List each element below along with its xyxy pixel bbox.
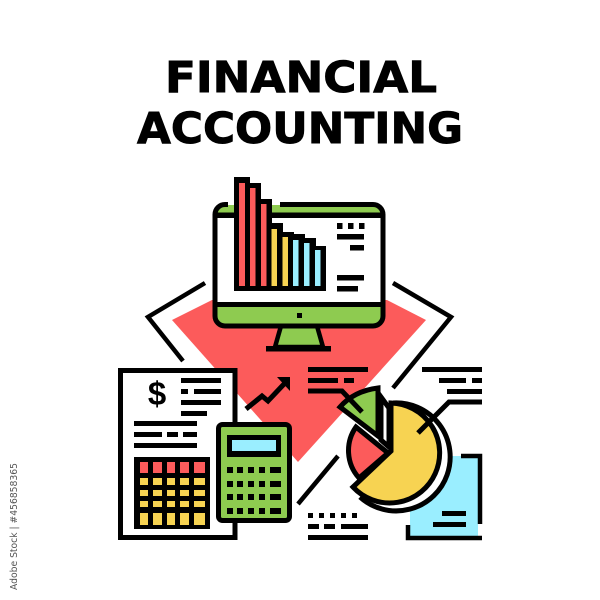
calculator screen	[227, 435, 281, 457]
red diamond background	[172, 300, 426, 462]
left chevron line	[148, 283, 205, 361]
monitor body	[215, 204, 383, 326]
lower text lines	[308, 513, 368, 540]
diagonal line	[298, 456, 338, 504]
calculator	[218, 424, 290, 520]
monitor screen text lines	[337, 223, 364, 292]
bar chart	[234, 177, 326, 291]
financial document	[120, 370, 235, 538]
monitor stand	[266, 326, 331, 352]
title	[137, 53, 463, 154]
right chevron line	[393, 283, 451, 388]
white slice	[381, 397, 389, 447]
stock id caption: Adobe Stock | #456858365	[9, 463, 20, 590]
red slice	[349, 427, 388, 478]
dollar sign: $	[148, 375, 166, 412]
title: ACCOUNTING	[137, 104, 463, 154]
blue note card	[408, 456, 482, 538]
document table	[134, 457, 210, 529]
title: FINANCIAL	[165, 53, 437, 103]
upper right pie label	[418, 367, 482, 433]
monitor	[215, 177, 383, 352]
yellow slice	[353, 403, 440, 503]
growth arrow	[246, 377, 290, 409]
upper left pie label	[308, 367, 368, 412]
document text lines	[134, 378, 221, 448]
calculator buttons	[227, 467, 281, 514]
green slice	[340, 388, 378, 436]
pie shadow arc	[360, 403, 450, 511]
pie chart	[340, 388, 450, 511]
